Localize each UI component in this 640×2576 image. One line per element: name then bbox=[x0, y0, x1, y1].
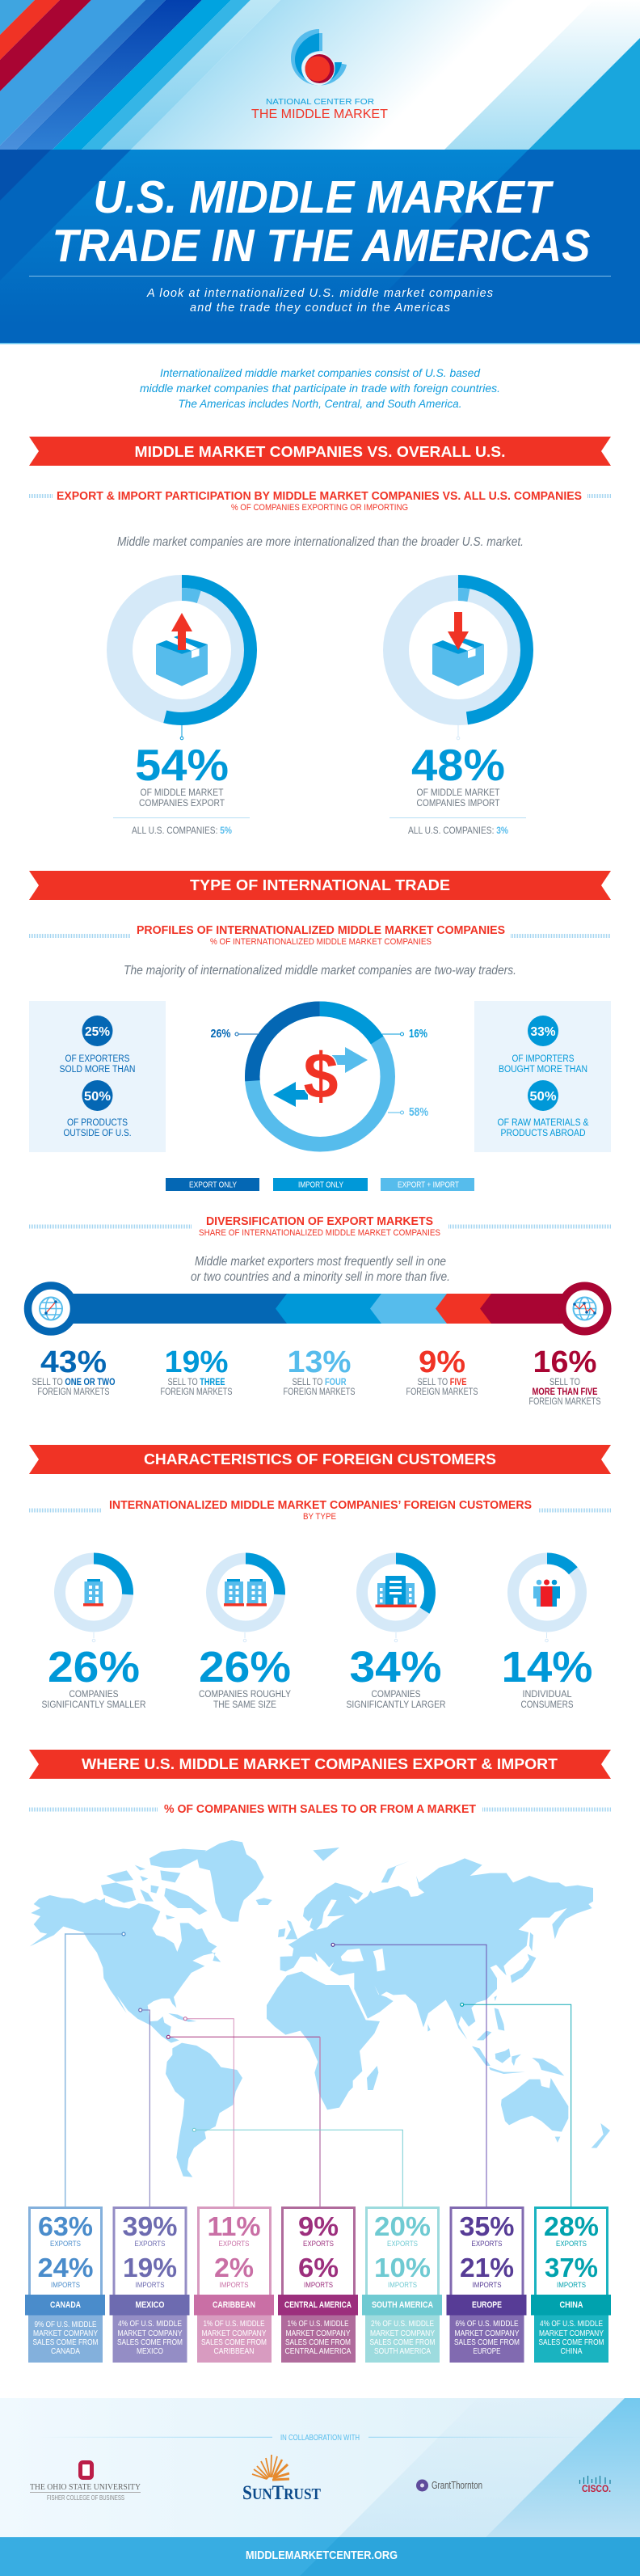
all US companies export: ALL U.S. COMPANIES: 5% bbox=[132, 826, 232, 836]
subtitle: A look at internationalized U.S. middle market companies bbox=[146, 287, 493, 300]
card: Europe: SALES COME FROM bbox=[454, 2338, 520, 2347]
icon: box with down arrow bbox=[432, 612, 484, 686]
card: Mexico: 39% bbox=[123, 2211, 178, 2241]
card: Caribbean: MARKET COMPANY bbox=[202, 2329, 267, 2338]
statement: two-way traders: The majority of internationalized middle market companies are two-way traders. bbox=[124, 964, 516, 978]
collaboration heading: IN COLLABORATION WITH bbox=[280, 2434, 360, 2443]
stat: 16% more than five markets: MORE THAN FIVE bbox=[532, 1387, 598, 1397]
legend: IMPORT ONLY bbox=[298, 1180, 343, 1190]
card: Central America bbox=[278, 2207, 358, 2363]
header background with diagonal stripes bbox=[0, 0, 640, 150]
icon: logo mark bbox=[291, 29, 347, 86]
statement: more internationalized: Middle market companies are more internationalized than the broader U.S. market. bbox=[117, 535, 524, 549]
callout: 58% bbox=[388, 1105, 428, 1119]
card: China: EXPORTS bbox=[556, 2240, 587, 2249]
label: CONSUMERS bbox=[520, 1700, 574, 1710]
heading: export and import participation: EXPORT & IMPORT PARTICIPATION BY MIDDLE MARKET COMPANIES VS. ALL U.S. COMPANIES bbox=[57, 490, 582, 503]
card: Canada bbox=[25, 2207, 105, 2363]
leader: South America bbox=[192, 2128, 402, 2206]
card: Central America: CENTRAL AMERICA bbox=[284, 2300, 352, 2310]
donut chart: 34% bbox=[362, 1559, 430, 1642]
statement: export markets: or two countries and a minority sell in more than five. bbox=[191, 1270, 450, 1284]
card: Canada: SALES COME FROM bbox=[32, 2338, 99, 2347]
logo: Ohio State University: THE OHIO STATE UNIVERSITY bbox=[30, 2482, 141, 2492]
text: raw materials: PRODUCTS ABROAD bbox=[501, 1129, 585, 1138]
callout: 58%: 58% bbox=[409, 1105, 428, 1119]
card: Caribbean: CARIBBEAN bbox=[213, 2347, 254, 2356]
text: of products: OF PRODUCTS bbox=[67, 1118, 128, 1128]
donut chart: 54% export bbox=[113, 581, 251, 719]
world map bbox=[30, 1840, 610, 2177]
bar chart: export markets bbox=[27, 1286, 608, 1332]
card: South America: SALES COME FROM bbox=[370, 2338, 435, 2347]
label: SIGNIFICANTLY LARGER bbox=[346, 1700, 446, 1710]
heading: profiles: % OF INTERNATIONALIZED MIDDLE MARKET COMPANIES bbox=[210, 937, 432, 947]
stat: 13% four markets: SELL TO FOUR bbox=[293, 1378, 347, 1387]
card: China: 28% bbox=[544, 2211, 599, 2241]
leader: Caribbean bbox=[183, 2017, 234, 2206]
card: Central America: MARKET COMPANY bbox=[286, 2329, 351, 2338]
heading: profiles bbox=[29, 924, 611, 947]
label: COMPANIES bbox=[372, 1690, 421, 1700]
banner: characteristics of foreign customers: CHARACTERISTICS OF FOREIGN CUSTOMERS bbox=[144, 1451, 496, 1467]
card: Mexico: SALES COME FROM bbox=[117, 2338, 183, 2347]
card: Central America: EXPORTS bbox=[303, 2240, 334, 2249]
stat: 9% five markets: 9% bbox=[419, 1345, 465, 1379]
logo: Grant Thornton: GrantThornton bbox=[432, 2479, 482, 2491]
icon: two buildings bbox=[224, 1579, 267, 1606]
card: Canada: IMPORTS bbox=[51, 2281, 80, 2290]
badge: 25% bbox=[82, 1016, 113, 1046]
card: Caribbean: 11% bbox=[207, 2211, 260, 2241]
label bbox=[42, 1690, 145, 1710]
icon: right globe bbox=[562, 1286, 608, 1331]
stat: 13% four markets: FOREIGN MARKETS bbox=[283, 1387, 356, 1397]
title: TRADE IN THE AMERICAS bbox=[52, 220, 590, 272]
stat: 43% one or two markets: SELL TO ONE OR TWO bbox=[32, 1378, 116, 1387]
donut chart: 48% import bbox=[389, 581, 527, 719]
logo text: NATIONAL CENTER FOR bbox=[266, 98, 374, 107]
stat: 13% four markets: 13% bbox=[288, 1345, 351, 1379]
card: South America: 2% OF U.S. MIDDLE bbox=[371, 2320, 434, 2329]
text: of products: OUTSIDE OF U.S. bbox=[63, 1129, 131, 1138]
card: Canada: CANADA bbox=[51, 2347, 80, 2356]
stat label bbox=[417, 788, 499, 809]
banner: middle market companies vs overall US: MIDDLE MARKET COMPANIES VS. OVERALL U.S. bbox=[134, 443, 506, 460]
donut chart: 26% bbox=[212, 1559, 280, 1642]
intro text bbox=[140, 366, 500, 410]
label: INDIVIDUAL bbox=[522, 1690, 572, 1700]
card: Europe: 21% bbox=[460, 2253, 514, 2283]
card: Caribbean: CARIBBEAN bbox=[213, 2300, 255, 2310]
panel: import donut bbox=[389, 581, 527, 836]
pin bbox=[180, 725, 183, 740]
text: of importers: OF IMPORTERS bbox=[512, 1054, 575, 1064]
legend: EXPORT + IMPORT bbox=[398, 1180, 459, 1190]
text: of importers bbox=[499, 1054, 587, 1075]
card: Mexico: 4% OF U.S. MIDDLE bbox=[118, 2320, 182, 2329]
card: China: CHINA bbox=[559, 2300, 583, 2310]
card: Europe: EUROPE bbox=[474, 2347, 501, 2356]
intro text: Internationalized middle market companies consist of U.S. based bbox=[160, 366, 481, 379]
donut chart: 26% bbox=[60, 1559, 128, 1642]
banner: middle market companies vs overall US bbox=[29, 437, 611, 466]
footer url bar bbox=[0, 2537, 640, 2576]
heading: foreign customers: INTERNATIONALIZED MIDDLE MARKET COMPANIES’ FOREIGN CUSTOMERS bbox=[109, 1499, 532, 1512]
stat: 9% five markets bbox=[406, 1345, 478, 1397]
card: Europe: EXPORTS bbox=[472, 2240, 503, 2249]
label: COMPANIES ROUGHLY bbox=[199, 1690, 291, 1700]
card: Caribbean: EXPORTS bbox=[218, 2240, 249, 2249]
card: China: SALES COME FROM bbox=[538, 2338, 604, 2347]
card: China: MARKET COMPANY bbox=[539, 2329, 604, 2338]
card: Europe: 6% OF U.S. MIDDLE bbox=[456, 2320, 519, 2329]
banner: characteristics of foreign customers bbox=[29, 1445, 611, 1474]
heading: percent of companies with sales: % OF COMPANIES WITH SALES TO OR FROM A MARKET bbox=[164, 1803, 476, 1816]
map: Americas and Greenland bbox=[30, 1840, 272, 2177]
card: China: CHINA bbox=[561, 2347, 583, 2356]
card: Mexico: MARKET COMPANY bbox=[118, 2329, 183, 2338]
donut chart: 14% bbox=[513, 1559, 581, 1642]
banner: type of international trade: TYPE OF INTERNATIONAL TRADE bbox=[190, 876, 450, 893]
badge: 25%: 25% bbox=[85, 1025, 110, 1039]
heading: foreign customers: BY TYPE bbox=[303, 1512, 336, 1522]
card: Central America: 6% bbox=[298, 2253, 339, 2283]
stat: 48%: 48% bbox=[411, 740, 505, 790]
card: South America: SOUTH AMERICA bbox=[374, 2347, 431, 2356]
banner: type of international trade bbox=[29, 871, 611, 900]
logo: Ohio State University bbox=[30, 2463, 141, 2502]
leader: Central America bbox=[166, 2035, 320, 2206]
heading: diversification: SHARE OF INTERNATIONALIZED MIDDLE MARKET COMPANIES bbox=[199, 1228, 440, 1238]
card: Central America: 1% OF U.S. MIDDLE bbox=[288, 2320, 349, 2329]
card: China bbox=[531, 2207, 611, 2363]
card: Mexico bbox=[110, 2207, 189, 2363]
text: of products bbox=[63, 1118, 131, 1138]
stat: 14%: 14% bbox=[501, 1643, 593, 1691]
leader: Europe bbox=[331, 1943, 486, 2206]
stat: 16% more than five markets: FOREIGN MARKETS bbox=[528, 1397, 601, 1407]
heading: foreign customers bbox=[29, 1499, 611, 1522]
leader: Canada bbox=[65, 1932, 125, 2206]
logo: Grant Thornton bbox=[416, 2479, 482, 2492]
stat label: OF MIDDLE MARKET bbox=[417, 788, 499, 798]
stat: 13% four markets bbox=[283, 1345, 356, 1397]
text: of importers: BOUGHT MORE THAN bbox=[499, 1065, 587, 1075]
stat: 19% three markets bbox=[160, 1345, 233, 1397]
card: Central America: SALES COME FROM bbox=[285, 2338, 351, 2347]
card: Caribbean: IMPORTS bbox=[220, 2281, 249, 2290]
card: China: 4% OF U.S. MIDDLE bbox=[540, 2320, 603, 2329]
card: South America: 20% bbox=[374, 2211, 431, 2241]
badge: 33% bbox=[528, 1016, 558, 1046]
stat: 16% more than five markets: 16% bbox=[533, 1345, 596, 1379]
stat: 43% one or two markets bbox=[32, 1345, 116, 1397]
stat: 34%: 34% bbox=[349, 1643, 441, 1691]
card: Mexico: MEXICO bbox=[137, 2347, 163, 2356]
stat: 19% three markets: 19% bbox=[165, 1345, 228, 1379]
icon: three people bbox=[533, 1580, 560, 1607]
stat: 43% one or two markets: FOREIGN MARKETS bbox=[37, 1387, 110, 1397]
card: Mexico: IMPORTS bbox=[136, 2281, 165, 2290]
footer panel bbox=[0, 2398, 640, 2537]
logo: Cisco bbox=[580, 2476, 611, 2494]
card: South America: MARKET COMPANY bbox=[370, 2329, 435, 2338]
card: Europe: EUROPE bbox=[472, 2300, 502, 2310]
stat: 54%: 54% bbox=[135, 740, 229, 790]
heading: export and import participation bbox=[29, 490, 611, 513]
card: Canada: CANADA bbox=[50, 2300, 81, 2310]
icon: left globe bbox=[27, 1286, 74, 1332]
badge: 50% bbox=[528, 1080, 558, 1111]
panel: smaller companies bbox=[42, 1559, 145, 1710]
stat: 43% one or two markets: 43% bbox=[40, 1345, 107, 1379]
card: Central America: CENTRAL AMERICA bbox=[284, 2347, 352, 2356]
stat label: OF MIDDLE MARKET bbox=[141, 788, 223, 798]
card: South America bbox=[362, 2207, 442, 2363]
card: Central America: IMPORTS bbox=[304, 2281, 333, 2290]
all US companies import: ALL U.S. COMPANIES: 3% bbox=[408, 826, 508, 836]
donut chart: trade profile bbox=[210, 1005, 428, 1148]
card: Canada: EXPORTS bbox=[50, 2240, 81, 2249]
card: China: IMPORTS bbox=[557, 2281, 586, 2290]
logo text: THE MIDDLE MARKET bbox=[251, 108, 389, 121]
logo text bbox=[251, 98, 389, 121]
heading: diversification: DIVERSIFICATION OF EXPORT MARKETS bbox=[206, 1215, 433, 1228]
callout: 16% bbox=[382, 1027, 427, 1041]
label: THE SAME SIZE bbox=[213, 1700, 276, 1710]
legend: EXPORT ONLY bbox=[189, 1180, 237, 1190]
card: Europe: IMPORTS bbox=[472, 2281, 501, 2290]
logo: SunTrust: SUNTRUST bbox=[242, 2482, 322, 2504]
icon: arrows and dollar bbox=[273, 1040, 368, 1112]
panel: importers bbox=[474, 1001, 611, 1152]
legend bbox=[166, 1178, 474, 1191]
text: raw materials bbox=[498, 1118, 589, 1138]
card: Mexico: EXPORTS bbox=[134, 2240, 165, 2249]
label bbox=[520, 1690, 574, 1710]
badge: 50%: 50% bbox=[84, 1090, 111, 1104]
card: Europe: 35% bbox=[459, 2211, 514, 2241]
card: Mexico: MEXICO bbox=[136, 2300, 165, 2310]
card: South America: IMPORTS bbox=[388, 2281, 417, 2290]
stat: 9% five markets: SELL TO FIVE bbox=[417, 1378, 467, 1387]
leader lines from map to market cards bbox=[65, 1932, 571, 2206]
card: Caribbean bbox=[194, 2207, 274, 2363]
stat: 26%: 26% bbox=[199, 1643, 291, 1691]
icon: large building bbox=[375, 1576, 417, 1607]
stat: 19% three markets: SELL TO THREE bbox=[168, 1378, 225, 1387]
stat: 16% more than five markets: SELL TO bbox=[549, 1378, 580, 1387]
card: China: 37% bbox=[545, 2253, 598, 2283]
label: COMPANIES bbox=[69, 1690, 119, 1700]
stat label: COMPANIES EXPORT bbox=[139, 799, 225, 809]
card: Europe: MARKET COMPANY bbox=[454, 2329, 520, 2338]
callout: 16%: 16% bbox=[409, 1027, 427, 1041]
map: Eurasia, Africa and Oceania bbox=[267, 1848, 610, 2148]
statement: export markets: Middle market exporters most frequently sell in one bbox=[195, 1255, 446, 1269]
icon: small building bbox=[83, 1579, 103, 1606]
icon: arrows and dollar: $ bbox=[304, 1040, 338, 1112]
leader: Mexico bbox=[139, 2008, 149, 2206]
badge: 50%: 50% bbox=[530, 1090, 556, 1104]
badge: 33%: 33% bbox=[530, 1025, 556, 1039]
panel: export donut bbox=[113, 581, 251, 836]
callout: 26% bbox=[210, 1027, 258, 1041]
logo: Ohio State University: FISHER COLLEGE OF BUSINESS bbox=[47, 2494, 124, 2502]
logo: Cisco: CISCO. bbox=[582, 2483, 611, 2494]
intro text: middle market companies that participate in trade with foreign countries. bbox=[140, 382, 500, 395]
card: Central America: 9% bbox=[298, 2211, 339, 2241]
heading: profiles: PROFILES OF INTERNATIONALIZED MIDDLE MARKET COMPANIES bbox=[137, 924, 505, 937]
banner: where companies export and import: WHERE U.S. MIDDLE MARKET COMPANIES EXPORT & IMPORT bbox=[82, 1755, 558, 1772]
footer url bar: MIDDLEMARKETCENTER.ORG bbox=[246, 2549, 398, 2562]
stat: 9% five markets: FOREIGN MARKETS bbox=[406, 1387, 478, 1397]
card: South America: SOUTH AMERICA bbox=[372, 2300, 433, 2310]
card: South America: EXPORTS bbox=[387, 2240, 418, 2249]
card: Canada: 9% OF U.S. MIDDLE bbox=[34, 2321, 97, 2329]
intro text: The Americas includes North, Central, and South America. bbox=[178, 397, 462, 410]
panel: same size companies bbox=[199, 1559, 291, 1710]
panel: larger companies bbox=[346, 1559, 446, 1710]
text: of exporters: OF EXPORTERS bbox=[65, 1054, 130, 1064]
stat label bbox=[139, 788, 225, 809]
card: Caribbean: 1% OF U.S. MIDDLE bbox=[204, 2320, 265, 2329]
card: Caribbean: SALES COME FROM bbox=[201, 2338, 267, 2347]
panel: exporters bbox=[29, 1001, 166, 1152]
card: South America: 10% bbox=[374, 2253, 431, 2283]
card: Canada: 63% bbox=[38, 2211, 93, 2241]
title bbox=[52, 171, 590, 272]
title: U.S. MIDDLE MARKET bbox=[94, 171, 554, 223]
logo: SunTrust bbox=[242, 2455, 322, 2504]
label bbox=[199, 1690, 291, 1710]
leader: China bbox=[461, 2003, 571, 2206]
logo: National Center for the Middle Market bbox=[251, 29, 389, 121]
card: Caribbean: 2% bbox=[214, 2253, 254, 2283]
card: Mexico: 19% bbox=[123, 2253, 177, 2283]
icon: box with up arrow bbox=[156, 613, 208, 686]
stat: 19% three markets: FOREIGN MARKETS bbox=[160, 1387, 233, 1397]
statement: export markets bbox=[191, 1255, 450, 1284]
stat: 16% more than five markets bbox=[528, 1345, 601, 1407]
subtitle: and the trade they conduct in the Americas bbox=[190, 302, 450, 315]
card: Canada: 24% bbox=[37, 2253, 94, 2283]
heading: export and import participation: % OF COMPANIES EXPORTING OR IMPORTING bbox=[231, 503, 408, 513]
badge: 50% bbox=[82, 1080, 113, 1111]
text: raw materials: OF RAW MATERIALS & bbox=[498, 1118, 589, 1128]
text: of exporters bbox=[60, 1054, 136, 1075]
label bbox=[346, 1690, 446, 1710]
label: SIGNIFICANTLY SMALLER bbox=[42, 1700, 145, 1710]
subtitle bbox=[146, 287, 493, 315]
banner: where companies export and import bbox=[29, 1750, 611, 1779]
panel: individual consumers bbox=[501, 1559, 593, 1710]
stat label: COMPANIES IMPORT bbox=[417, 799, 499, 809]
title band bbox=[0, 150, 640, 344]
heading: diversification bbox=[29, 1215, 611, 1238]
callout: 26%: 26% bbox=[210, 1027, 231, 1041]
pin bbox=[457, 725, 460, 740]
card: Europe bbox=[446, 2207, 527, 2363]
stat: 26%: 26% bbox=[48, 1643, 140, 1691]
text: of exporters: SOLD MORE THAN bbox=[60, 1065, 136, 1075]
card: Canada: MARKET COMPANY bbox=[33, 2329, 98, 2338]
